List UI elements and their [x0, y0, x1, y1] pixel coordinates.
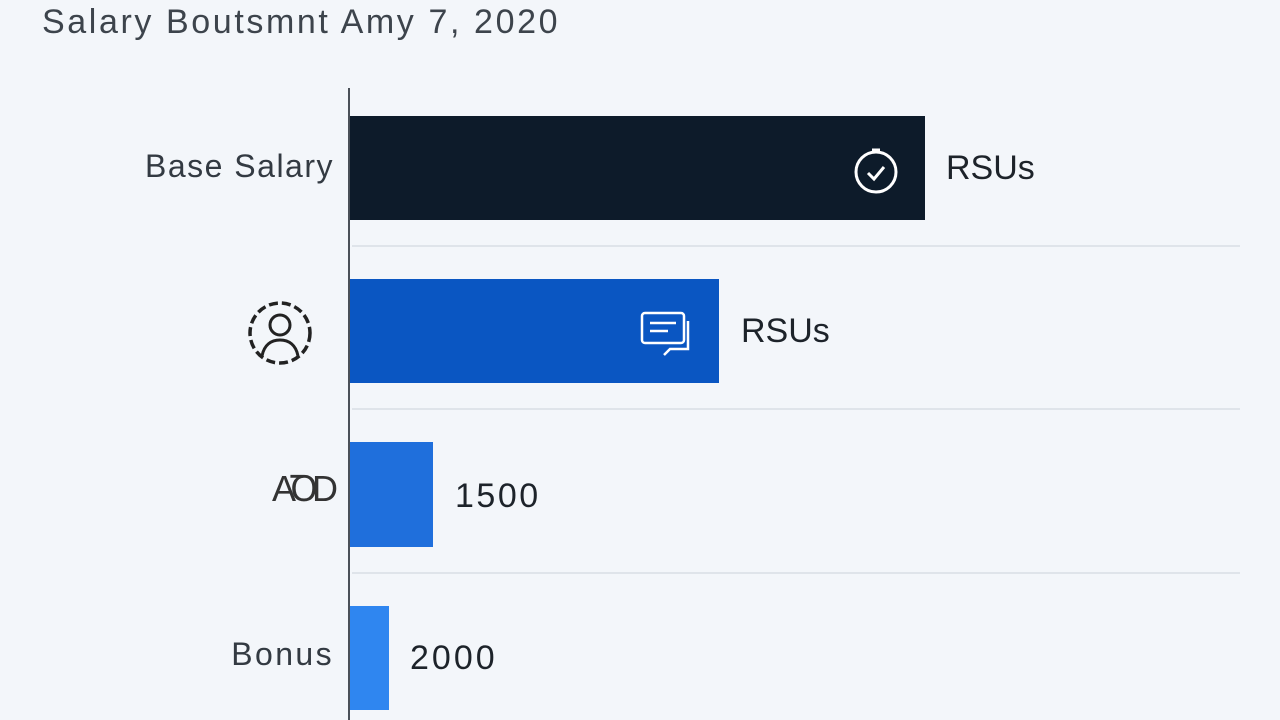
label: Bonus: Bonus — [231, 636, 334, 672]
icon: gear person — [248, 301, 312, 365]
value: RSUs 2: RSUs — [741, 312, 830, 350]
icon: clock check — [854, 148, 898, 194]
value: 2000: 2000 — [410, 639, 498, 677]
label: AD: AꝹD — [272, 468, 332, 509]
value: RSUs 1: RSUs — [946, 149, 1035, 187]
bar 3 — [350, 442, 433, 547]
bar 2 — [350, 279, 719, 383]
label: Base Salary: Base Salary — [145, 148, 334, 184]
title: Salary Boutsmnt Amy 7, 2020 — [42, 3, 560, 41]
bar 4 — [350, 606, 389, 710]
bar: Base Salary — [350, 116, 925, 220]
icon: chat — [640, 312, 690, 356]
value: 1500: 1500 — [455, 477, 541, 515]
axis line — [348, 88, 350, 720]
